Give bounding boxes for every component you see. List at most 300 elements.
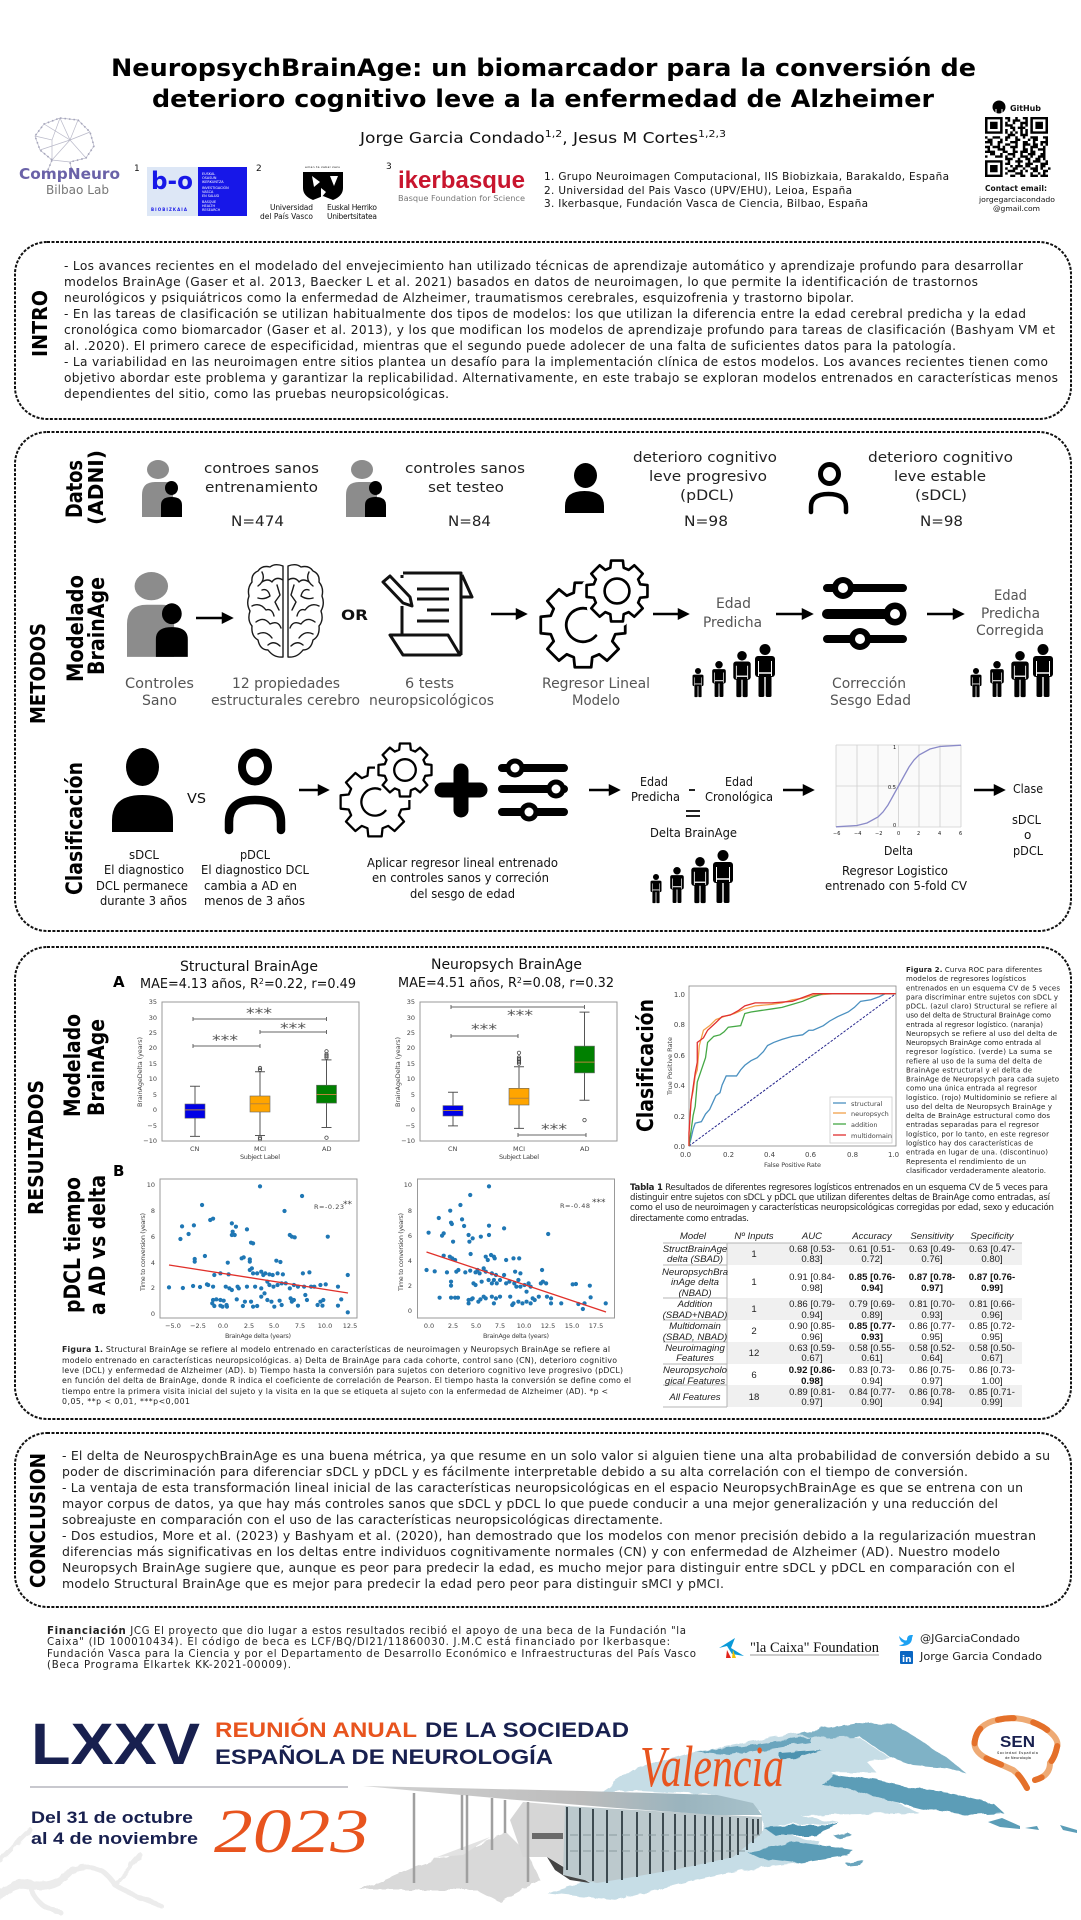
legend: multidomain: [851, 1132, 892, 1140]
figure 2 caption: logístico hay dos características de: [906, 1140, 1033, 1148]
significance brackets: ***: [280, 1021, 306, 1037]
corrected age: Predicha: [981, 606, 1040, 622]
intro text: objetivo abordar este problema y garantizar la replicabilidad. Alternativamente, en este trabajo se exploran modelos entrenados en características menos: [64, 371, 1058, 385]
figure 2 caption: entrada al regresor logístico. (naranja): [906, 1021, 1043, 1029]
github QR and contact: Contact email:: [985, 184, 1047, 193]
intro text: - Los avances recientes en el modelado del envejecimiento han utilizado técnicas de aprendizaje automático y aprendizaje profundo para desarrollar: [64, 259, 1024, 273]
scatter plot: neuropsych: 2.5: [448, 1322, 458, 1330]
cohort: test controls: set testeo: [428, 480, 504, 496]
row: addition: 0.96]: [981, 1310, 1003, 1321]
row: neuroimaging: 0.61]: [861, 1353, 883, 1364]
box plot: structural: AD: [322, 1145, 331, 1153]
modelado heading: Modelado: [64, 575, 89, 682]
logo: Biobizkaia: BASQUE: [202, 200, 216, 204]
row: all: 0.84 [0.77-: [849, 1387, 895, 1398]
significance brackets: ***: [541, 1122, 567, 1138]
box plot: neuropsych: 5: [411, 1091, 415, 1099]
row: addition: 0.79 [0.69-: [849, 1299, 895, 1310]
row: NBAD: (NBAD): [678, 1288, 712, 1299]
row: NBAD: 0.97]: [921, 1283, 943, 1294]
panel letters: B: [113, 1162, 124, 1180]
box plot: neuropsych: 0: [411, 1106, 415, 1114]
cohort: pDCL: leve progresivo: [649, 469, 767, 485]
row: neuropsychological: 0.98]: [801, 1376, 823, 1387]
arrow: [974, 786, 1003, 794]
arrow: [196, 614, 231, 622]
captions: El diagnostico DCL: [201, 863, 309, 877]
significance brackets: ***: [507, 1008, 533, 1024]
modelado heading: Modelado: [61, 1014, 86, 1117]
box plot: neuropsych: −10: [401, 1137, 415, 1145]
logo: Biobizkaia: OSASUN: [202, 176, 217, 180]
row: NBAD: inAge delta: [671, 1277, 719, 1288]
plot titles: [140, 957, 614, 992]
captions: en controles sanos y correción: [372, 871, 549, 885]
row: all: 0.97]: [801, 1397, 823, 1408]
datos heading: Datos: [63, 460, 88, 518]
scatter plot: neuropsych: 5.0: [471, 1322, 481, 1330]
box plot: structural: 15: [149, 1060, 157, 1068]
figure 2 caption: Representa el rendimiento de un: [906, 1158, 1026, 1166]
modelado heading: [64, 575, 110, 682]
conclusion text: poder de discriminación para diferenciar sDCL y pDCL y es fácilmente interpretable debido a su alta correlación con el tiempo de conversión.: [62, 1464, 968, 1479]
ROC chart: False Positive Rate: [764, 1161, 821, 1169]
watercolor washes: [547, 1722, 1004, 1900]
logo: Biobizkaia: RESEARCH: [202, 208, 221, 212]
predicted age: Edad: [716, 596, 751, 612]
figure 2 caption: BrainAge de Neuropsych para cada sujeto: [906, 1076, 1059, 1084]
row: NBAD: 0.87 [0.76-: [969, 1272, 1015, 1283]
delta formula: [631, 774, 773, 840]
box plot: neuropsych: Subject Label: [499, 1153, 539, 1161]
cohort: train controls: entrenamiento: [205, 480, 318, 496]
corrected age: Edad: [994, 588, 1027, 604]
github QR and contact: [978, 100, 1055, 213]
icon: controls: [127, 572, 188, 657]
affiliations: [544, 171, 949, 210]
delta formula: Predicha: [631, 789, 680, 804]
logo: SEN: [975, 1718, 1057, 1788]
ROC chart: 0.4: [674, 1082, 686, 1090]
row: addition: 1: [751, 1304, 757, 1315]
cohort: train controls: N=474: [231, 514, 284, 530]
box plot: structural: MCI: [254, 1145, 266, 1153]
plot titles: MAE=4.13 años, R: [140, 977, 261, 992]
scatter plot: structural: 2: [151, 1284, 155, 1292]
cohort: sDCL: leve estable: [894, 469, 986, 485]
row: SBAD: 0.63 [0.49-: [909, 1244, 955, 1255]
scatter plot: structural: Time to conversion (years): [139, 1213, 147, 1292]
row: neuroimaging: 0.58 [0.55-: [849, 1343, 895, 1354]
scatter plot: neuropsych: 17.5: [589, 1322, 603, 1330]
box plot: structural: 20: [149, 1044, 157, 1052]
logo: Biobizkaia: 1: [134, 164, 140, 174]
row: SBAD: 0.80]: [981, 1254, 1003, 1265]
logo: Universidad del Pais Vasco: [256, 164, 377, 221]
scatter plot: structural: 5.0: [269, 1322, 279, 1330]
scatter plot: neuropsych: R=-0.48: [560, 1202, 590, 1210]
conclusion heading: CONCLUSION: [26, 1453, 50, 1588]
cohort: pDCL: (pDCL): [680, 488, 734, 504]
figure 2 caption: uso del delta de Structural BrainAge como: [906, 1012, 1051, 1020]
cohort: train controls: [204, 461, 319, 530]
figure 1 caption: tiempo entre la primera visita inicial del sujeto y la visita en la que se etiqueta al sujeto con la enfermedad de Alzheimer (AD). *p <: [62, 1387, 608, 1396]
ROC chart: 0.8: [674, 1021, 685, 1029]
box plot: structural: Subject Label: [240, 1153, 280, 1161]
logistic curve chart: 0.5: [888, 785, 896, 791]
table header: Specificity: [970, 1231, 1015, 1242]
year: 2023: [214, 1798, 369, 1866]
authors: Jorge Garcia Condado: [360, 129, 528, 147]
row: multidomain: 0.95]: [981, 1332, 1003, 1343]
plot titles: =0.22, r=0.49: [264, 977, 356, 992]
row: neuroimaging: 0.67]: [981, 1353, 1003, 1364]
panel letters: A: [113, 973, 125, 991]
cohort: test controls: [405, 461, 525, 530]
arrow: [491, 610, 525, 618]
logistic curve chart: 6: [959, 831, 962, 837]
resultados heading: RESULTADOS: [24, 1080, 48, 1215]
icon: sDCL: [811, 464, 846, 512]
affiliations: 3. Ikerbasque, Fundación Vasca de Ciencia, Bilbao, España: [544, 198, 868, 210]
row: SBAD: 0.63 [0.47-: [969, 1244, 1015, 1255]
row: addition: 0.86 [0.79-: [789, 1299, 835, 1310]
row: addition: 0.81 [0.66-: [969, 1299, 1015, 1310]
captions: menos de 3 años: [204, 894, 305, 908]
row: NBAD: [662, 1267, 1015, 1299]
icon: sliders: [827, 577, 906, 650]
captions: pDCL: [240, 848, 270, 862]
row: neuroimaging: 0.67]: [801, 1353, 823, 1364]
row: NBAD: 1: [751, 1277, 757, 1288]
row: SBAD: [663, 1244, 1015, 1265]
logistic curve chart: 2: [917, 831, 920, 837]
congress dates: [31, 1808, 198, 1848]
plot titles: Structural BrainAge: [180, 959, 318, 975]
ROC chart: 0.4: [764, 1151, 776, 1159]
box plot: structural: −10: [143, 1137, 157, 1145]
significance brackets: ***: [246, 1006, 272, 1022]
icon: brain: [248, 565, 323, 657]
table 1 caption: Tabla 1 Resultados de diferentes regresores logísticos entrenados en un esquema CV de 5 veces para: [630, 1183, 1048, 1193]
logo: Biobizkaia: b-o: [151, 167, 193, 195]
scatter plot: neuropsych: 10: [404, 1181, 412, 1189]
ROC chart: 0.2: [674, 1113, 685, 1121]
captions: del sesgo de edad: [410, 887, 515, 901]
congress title: REUNIÓN ANUAL: [215, 1718, 417, 1742]
datos heading: [63, 450, 108, 525]
row: addition: 0.89]: [861, 1310, 883, 1321]
logo: la Caixa Foundation: [719, 1638, 879, 1658]
scatter plot: structural: 10.0: [318, 1322, 332, 1330]
cohort: sDCL: N=98: [920, 514, 963, 530]
ROC chart: 1.0: [888, 1151, 899, 1159]
authors: 1,2,3: [698, 129, 726, 140]
scatter plot: structural: 10: [147, 1181, 155, 1189]
logo: Biobizkaia: BIOBIZKAIA: [151, 207, 188, 212]
conclusion text: diferencias más significativas en los deltas entre individuos cognitivamente normales (CN) y con enfermedad de Alzheimer (AD). Nuestro modelo: [62, 1544, 1000, 1559]
row: neuropsychological: 0.86 [0.73-: [969, 1365, 1015, 1376]
row: multidomain: 2: [751, 1326, 757, 1337]
conclusion text: mayor corpus de datos, ya que hay más controles sanos que sDCL y pDCL lo que puede conducir a una mejor generalización y una reducción del: [62, 1496, 998, 1511]
captions: sDCL: [129, 848, 159, 862]
figure 1 caption: 0,05, **p < 0,01, ***p<0,001: [62, 1397, 190, 1406]
figure 2 caption: uso del delta de Neuropsych BrainAge y: [906, 1103, 1052, 1111]
logo: CompNeuro Bilbao Lab: Bilbao Lab: [46, 183, 109, 197]
funding text: [47, 1625, 696, 1671]
corrected age: Corregida: [976, 623, 1044, 639]
intro text: [64, 259, 1058, 401]
panel: conclusion: [15, 1433, 1071, 1607]
scatter plot: structural: R=-0.23: [314, 1203, 344, 1211]
logo: Biobizkaia: VASCA: [202, 190, 214, 194]
icon: pDCL large: [229, 752, 281, 830]
scatter plot: structural: 6: [151, 1233, 155, 1241]
row: multidomain: 0.85 [0.77-: [849, 1321, 895, 1332]
icon: plus: [442, 771, 480, 810]
row: multidomain: 0.90 [0.85-: [789, 1321, 835, 1332]
row: addition: (SBAD+NBAD): [663, 1310, 727, 1321]
row: SBAD: 0.68 [0.53-: [789, 1244, 835, 1255]
box plot: structural: BrainAgeDelta (years): [136, 1037, 144, 1107]
box plot: neuropsych: 25: [407, 1029, 415, 1037]
box plot: neuropsych: MCI: [513, 1145, 525, 1153]
figure 2 caption: logístico, por lo tanto, en este regresor: [906, 1130, 1049, 1138]
captions: Sano: [142, 693, 177, 709]
panel: resultados: [15, 947, 1071, 1419]
row: neuroimaging: 0.58 [0.50-: [969, 1343, 1015, 1354]
figure 1 caption: Figura 1. Structural BrainAge se refiere al modelo entrenado en características de neuroimagen y Neuropsych BrainAge se refiere al: [62, 1345, 610, 1354]
captions: neuropsicológicos: [369, 693, 494, 709]
row: all: 0.90]: [861, 1397, 883, 1408]
plot titles: 2: [259, 977, 264, 986]
logo: Biobizkaia: INVESTIGACIÓN: [202, 185, 229, 190]
intro text: modelos BrainAge (Gaser et al. 2013, Baecker L et al. 2021) basados en datos de neuroimagen, lo que permite la identificación de trastornos: [64, 275, 978, 289]
captions: [125, 676, 911, 709]
panel: intro: [15, 242, 1071, 419]
intro heading: INTRO: [28, 290, 52, 357]
row: NBAD: 0.85 [0.76-: [849, 1272, 895, 1283]
legend: neuropsych: [851, 1110, 889, 1118]
icon: document: [383, 573, 472, 655]
cohort: sDCL: [868, 450, 1013, 530]
row: multidomain: [663, 1321, 1015, 1343]
logistic curve chart: −6: [833, 831, 840, 837]
logo: Ikerbasque: ikerbasque: [398, 167, 525, 194]
logo: SEN: SEN: [1000, 1734, 1035, 1751]
cohort: pDCL: N=98: [684, 514, 728, 530]
logistic captions: [825, 844, 968, 893]
captions: durante 3 años: [100, 894, 187, 908]
authors: , Jesus M Cortes: [562, 129, 698, 147]
captions: DCL permanece: [96, 879, 188, 893]
box plot: neuropsych: CN: [448, 1145, 458, 1153]
logo: CompNeuro Bilbao Lab: [19, 118, 120, 197]
row: SBAD: 0.83]: [801, 1254, 823, 1265]
modelado heading: [61, 1014, 110, 1117]
captions: [96, 848, 558, 908]
intro text: dependientes del sitio, como las pruebas neuropsicológicas.: [64, 387, 449, 401]
box plot: structural: [136, 998, 359, 1161]
row: NBAD: 0.94]: [861, 1283, 883, 1294]
intro text: - La variabilidad en las neuroimagen entre sitios plantea un desafío para la implementación clínica de estos modelos. Los avances recientes tienen como: [64, 355, 1048, 369]
logo: Universidad del Pais Vasco: Euskal Herriko: [327, 203, 377, 212]
logo: SEN: Sociedad Española: [997, 1751, 1038, 1755]
row: neuroimaging: 0.64]: [921, 1353, 943, 1364]
row: multidomain: 0.85 [0.72-: [969, 1321, 1015, 1332]
pDCL heading: [61, 1175, 111, 1315]
captions: Aplicar regresor lineal entrenado: [367, 856, 558, 870]
city: Valencia: [640, 1734, 784, 1799]
plot titles: 2: [517, 976, 522, 985]
row: neuropsychological: Neuropsycholo: [663, 1365, 728, 1376]
row: SBAD: 1: [751, 1249, 757, 1260]
row: all: All Features: [668, 1392, 721, 1403]
figure 2 caption: pDCL. (azul claro) Structural se refiere al: [906, 1002, 1057, 1010]
congress title: ESPAÑOLA DE NEUROLOGÍA: [215, 1746, 553, 1769]
box plot: structural: 30: [149, 1014, 157, 1022]
row: all: 0.94]: [921, 1397, 943, 1408]
logo: Biobizkaia: EN SALUD: [202, 194, 219, 198]
box plot: neuropsych: −5: [405, 1122, 415, 1130]
row: multidomain: Multidomain: [669, 1321, 721, 1332]
cohort: pDCL: [633, 450, 777, 530]
title: [111, 54, 976, 113]
box plot: neuropsych: 10: [407, 1075, 415, 1083]
figure 2 caption: modelos de regresores logísticos: [906, 975, 1026, 983]
icon: controls test: [346, 460, 386, 517]
box plot: structural: CN: [190, 1145, 200, 1153]
box plot: structural: 5: [153, 1091, 157, 1099]
table header: Accuracy: [851, 1231, 893, 1242]
significance brackets: [193, 1006, 326, 1049]
cohort: test controls: controles sanos: [405, 461, 525, 477]
row: SBAD: StructBrainAge: [663, 1244, 727, 1255]
plot titles: Neuropsych BrainAge: [431, 957, 582, 973]
logistic curve chart: 0: [893, 823, 896, 829]
figure 2 caption: clasificador verdaderamente aleatorio.: [906, 1167, 1046, 1175]
cohort: train controls: controes sanos: [204, 461, 319, 477]
captions: El diagnostico: [104, 863, 184, 877]
arrow: [299, 786, 327, 794]
title: deterioro cognitivo leve a la enfermedad de Alzheimer: [152, 85, 934, 113]
logistic curve chart: 1: [893, 745, 896, 751]
row: modelado brainage: [64, 561, 1053, 709]
scatter plot: structural: 2.5: [244, 1322, 254, 1330]
pDCL heading: a AD vs delta: [86, 1175, 111, 1315]
table header: Nº Inputs: [734, 1231, 774, 1242]
texture: neural cracks: [0, 1830, 160, 1912]
intro text: - En las tareas de clasificación se utilizan habitualmente dos tipos de modelos: los que utilizan la diferencia entre la edad cerebral predicha y la edad: [64, 307, 1026, 321]
row: multidomain: 0.95]: [921, 1332, 943, 1343]
row: neuropsychological: 0.83 [0.73-: [849, 1365, 895, 1376]
logo: SEN: de Neurología: [1005, 1756, 1031, 1760]
icon: sliders: [502, 758, 566, 822]
box plot: neuropsych: 30: [407, 1014, 415, 1022]
scatter plot: neuropsych: BrainAge delta (years): [483, 1332, 549, 1340]
significance brackets: ***: [471, 1022, 497, 1038]
figure 2 caption: regresor logístico. (verde) La suma se: [906, 1048, 1052, 1056]
output class: sDCL: [1012, 813, 1041, 827]
scatter plot: neuropsych: 15.0: [565, 1322, 579, 1330]
box plot: neuropsych: 35: [407, 998, 415, 1006]
predicted age: [703, 596, 762, 631]
arrow: [776, 610, 811, 618]
legend: addition: [851, 1121, 878, 1129]
scatter plot: structural: 7.5: [295, 1322, 305, 1330]
significance brackets: ***: [212, 1033, 238, 1049]
small washes: [988, 1818, 1077, 1833]
congress dates: al 4 de noviembre: [31, 1829, 198, 1848]
scatter plot: neuropsych: ***: [592, 1198, 606, 1208]
row: all: 0.99]: [981, 1397, 1003, 1408]
icon: family: [692, 644, 775, 697]
social links: in: [902, 1655, 912, 1665]
table header: Model: [680, 1231, 707, 1242]
scatter plot: structural: 4: [151, 1259, 155, 1267]
figure 2 caption: como una única entrada al regresor: [906, 1085, 1037, 1093]
scatter plot: neuropsych: 0: [408, 1307, 412, 1315]
significance brackets: [451, 1005, 586, 1138]
plot titles: MAE=4.51 años, R: [398, 976, 519, 991]
ROC chart: 0.0: [680, 1151, 691, 1159]
row: multidomain: (SBAD, NBAD): [663, 1332, 727, 1343]
row: multidomain: 0.93]: [861, 1332, 883, 1343]
row: neuroimaging: 0.63 [0.59-: [789, 1343, 835, 1354]
ROC chart: 0.2: [723, 1151, 734, 1159]
figure 2 caption: entrada en lugar de una. (discontinuo): [906, 1149, 1048, 1157]
social links: [899, 1632, 1042, 1665]
title: NeuropsychBrainAge: un biomarcador para la conversión de: [111, 54, 976, 82]
header: [19, 54, 1055, 221]
row: NBAD: 0.98]: [801, 1283, 823, 1294]
figure 2 caption: Neuropsych se refiere al uso del delta de: [906, 1030, 1057, 1038]
logo: Ikerbasque: Basque Foundation for Science: [398, 194, 525, 203]
row: all: [668, 1387, 1015, 1408]
table 1 caption: como el uso de neuroimagen y características neuropsicológicas corregidas por edad, sexo y educación: [630, 1202, 1054, 1213]
row: neuropsychological: gical Features: [665, 1376, 725, 1387]
row: neuropsychological: 0.86 [0.75-: [909, 1365, 955, 1376]
figure 2 caption: para discriminar entre sujetos con sDCL y: [906, 993, 1058, 1001]
row: neuropsychological: 6: [751, 1370, 757, 1381]
plot titles: =0.08, r=0.32: [522, 976, 614, 991]
box plot: structural: 10: [149, 1075, 157, 1083]
box plot: structural: 25: [149, 1029, 157, 1037]
scatter plot: neuropsych: 2: [408, 1282, 412, 1290]
icon: gears: [541, 561, 647, 667]
row: SBAD: delta (SBAD): [667, 1254, 723, 1265]
scatter plot: neuropsych: 7.5: [495, 1322, 505, 1330]
github QR and contact: GitHub: [1010, 104, 1041, 113]
box plot: neuropsych: [394, 998, 617, 1161]
logistic curve chart: −4: [854, 831, 861, 837]
figure 1 caption: en función del delta de BrainAge, donde R indica el coeficiente de correlación de Pearson. El tiempo hasta la conversión se define como el: [62, 1376, 631, 1385]
logo: Universidad del Pais Vasco: del País Vasco: [260, 212, 313, 221]
funding text: Financiación JCG El proyecto que dio lugar a estos resultados recibió el apoyo de una beca de la Fundación "la: [47, 1625, 686, 1637]
row: all: 0.89 [0.81-: [789, 1387, 835, 1398]
table header: [680, 1231, 1015, 1242]
row: SBAD: 0.72]: [861, 1254, 883, 1265]
logo: Ikerbasque: [386, 162, 525, 203]
logistic captions: Regresor Logistico: [842, 864, 948, 878]
row: all: 18: [749, 1392, 759, 1403]
modelado heading: BrainAge: [85, 1019, 110, 1116]
row: neuroimaging: 0.58 [0.52-: [909, 1343, 955, 1354]
cohort: sDCL: deterioro cognitivo: [868, 450, 1013, 466]
delta formula: Delta BrainAge: [650, 825, 737, 840]
table 1 caption: [630, 1183, 1054, 1224]
authors: 1,2: [545, 129, 562, 140]
